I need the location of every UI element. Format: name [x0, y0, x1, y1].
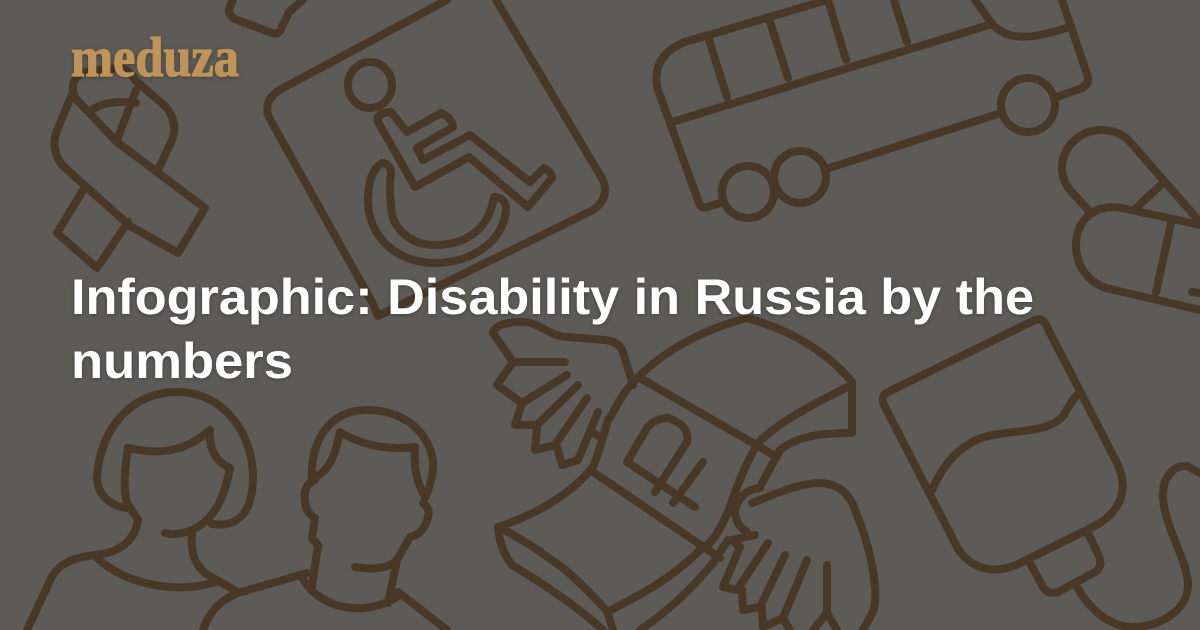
icon: winged ruble book	[493, 318, 875, 630]
logo: meduza: meduza	[71, 27, 239, 89]
icon: bus	[656, 0, 1088, 218]
icon: pills	[1062, 130, 1200, 310]
right wing	[752, 483, 875, 630]
title: Infographic: Disability in Russia by the	[71, 269, 1034, 325]
icon: awareness ribbon	[54, 68, 205, 268]
icon: IV drip bag	[883, 319, 1200, 627]
icon: small box at the top	[229, 0, 303, 34]
left wing	[493, 322, 633, 385]
icon: man	[203, 410, 447, 630]
title: numbers	[71, 333, 293, 389]
title	[71, 269, 1034, 389]
ruble sign	[627, 418, 703, 507]
icon: woman	[27, 392, 253, 630]
icon: wheelchair sign	[267, 0, 605, 316]
